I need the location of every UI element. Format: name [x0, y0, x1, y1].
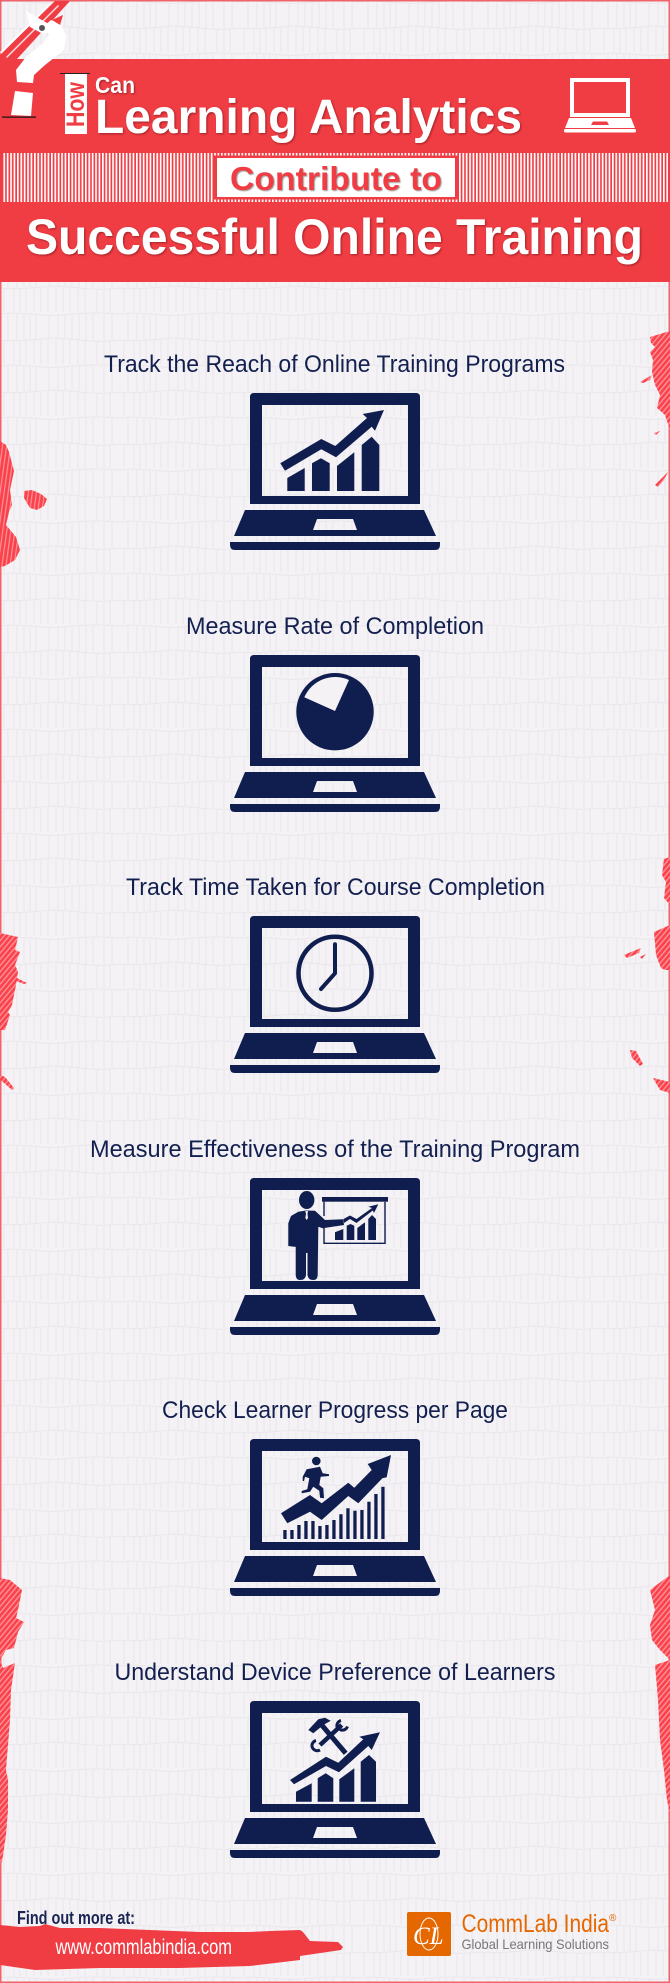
brush stroke — [0, 1924, 343, 1970]
logo name: CommLab India — [462, 1910, 609, 1938]
panel: track the reach — [104, 351, 565, 550]
striped ribbon — [2, 153, 668, 202]
panel: learner progress — [162, 1397, 508, 1596]
logo: CommLab India — [407, 1910, 617, 1956]
icon: laptop with bar chart — [230, 393, 440, 550]
ribbon — [0, 1, 70, 59]
text: find out more: Find out more at: — [17, 1908, 135, 1928]
icon: laptop with pie chart — [230, 655, 440, 812]
icon: question mark with ribbon — [0, 1, 70, 118]
question mark dot — [11, 91, 33, 116]
footer call to action — [0, 1908, 343, 1970]
heading: Measure Effectiveness of the Training Program — [90, 1136, 580, 1163]
title word: Can: Can — [95, 72, 135, 98]
heading: Measure Rate of Completion — [186, 613, 484, 640]
logo mark — [407, 1912, 451, 1956]
icon: white laptop — [564, 78, 636, 132]
icon: laptop with clock — [230, 916, 440, 1073]
panel: effectiveness — [90, 1136, 580, 1335]
banner background — [0, 59, 670, 282]
logo tagline: Global Learning Solutions — [462, 1936, 609, 1952]
logo mark: CL — [413, 1923, 444, 1950]
ribbon clip — [26, 11, 53, 34]
paint splatters left and right — [0, 331, 670, 1862]
panel: rate of completion — [186, 613, 484, 812]
icon: laptop with runner — [230, 1439, 440, 1596]
header banner — [0, 59, 670, 282]
panel: time taken — [126, 874, 545, 1073]
registered mark: ® — [609, 1913, 617, 1924]
heading: Understand Device Preference of Learners — [114, 1659, 556, 1686]
heading: Track the Reach of Online Training Programs — [104, 351, 565, 378]
box: contribute to: Contribute to — [230, 160, 442, 197]
text: url: www.commlabindia.com — [55, 1936, 232, 1959]
icon: laptop with presenter — [230, 1178, 440, 1335]
heading: Track Time Taken for Course Completion — [126, 874, 545, 901]
icon: laptop with tools and chart — [230, 1701, 440, 1858]
title: Successful Online Training: Successful Online Training — [26, 209, 643, 265]
title word: How: How — [62, 82, 90, 127]
panel: device preference — [114, 1659, 556, 1858]
title: Learning Analytics: Learning Analytics — [95, 91, 522, 144]
question mark body — [16, 20, 66, 83]
heading: Check Learner Progress per Page — [162, 1397, 508, 1424]
